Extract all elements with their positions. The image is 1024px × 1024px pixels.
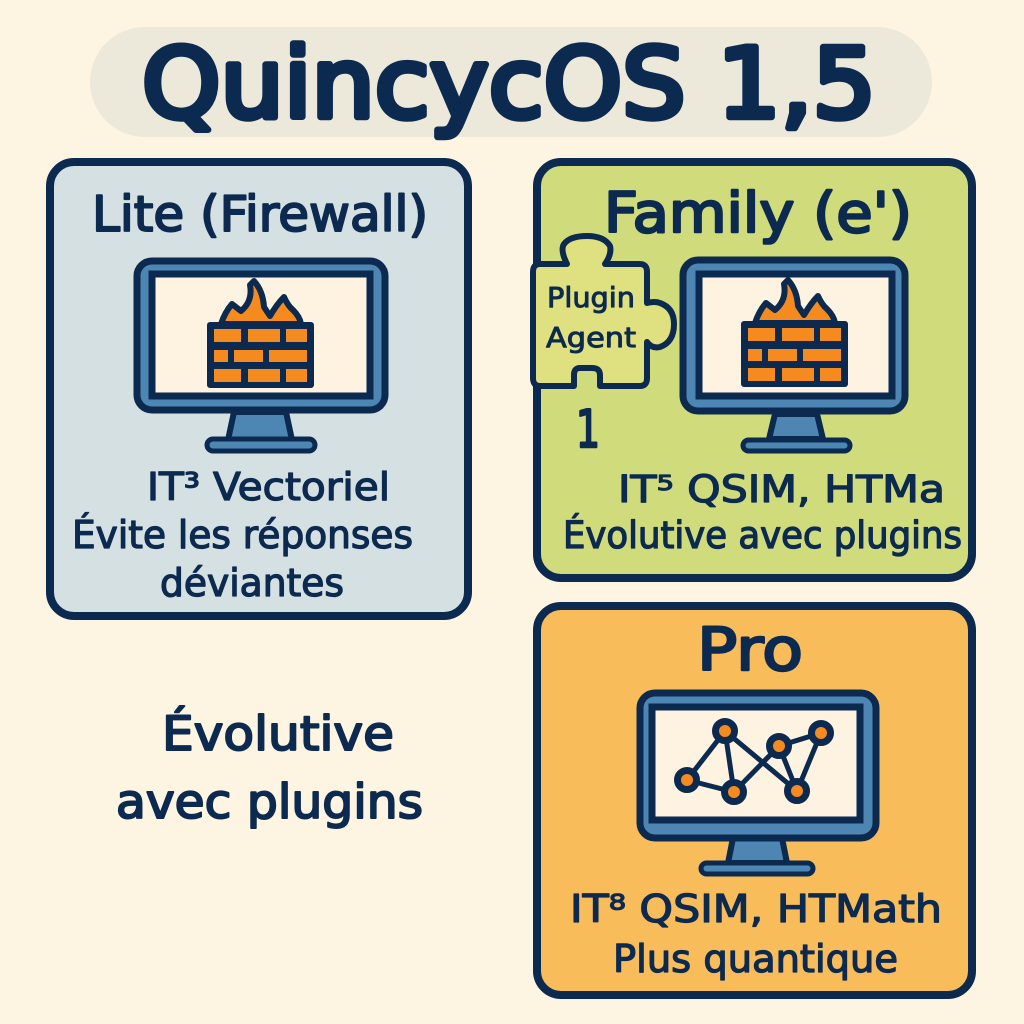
Family heading: Family (e') (604, 181, 912, 245)
Pro description (570, 887, 942, 981)
icon: puzzle piece Plugin Agent: Agent (546, 321, 636, 354)
panel: Family (533, 162, 972, 578)
side caption (116, 707, 423, 830)
Pro description: Plus quantique (613, 937, 898, 981)
title: QuincycOS 1,5 (142, 28, 876, 140)
side caption: Évolutive (162, 707, 394, 762)
icon: puzzle piece Plugin Agent (533, 236, 674, 386)
icon: monitor with firewall (683, 260, 905, 451)
Lite description (72, 465, 413, 605)
number 1: 1 (576, 400, 600, 460)
Lite heading: Lite (Firewall) (92, 186, 428, 243)
Family description: IT⁵ QSIM, HTMa (618, 468, 945, 511)
Lite description: Évite les réponses (72, 513, 413, 557)
panel: Lite (50, 162, 468, 616)
Lite description: IT³ Vectoriel (147, 465, 390, 509)
Pro description: IT⁸ QSIM, HTMath (570, 887, 942, 931)
icon: monitor with firewall (137, 261, 385, 451)
Family description (563, 468, 962, 557)
icon: monitor with network graph (640, 693, 876, 874)
Pro heading: Pro (697, 615, 803, 684)
Lite description: déviantes (160, 561, 344, 605)
Family description: Évolutive avec plugins (563, 513, 962, 557)
panel: Pro (537, 606, 972, 995)
icon: puzzle piece Plugin Agent: Plugin (547, 281, 635, 314)
side caption: avec plugins (116, 775, 423, 830)
